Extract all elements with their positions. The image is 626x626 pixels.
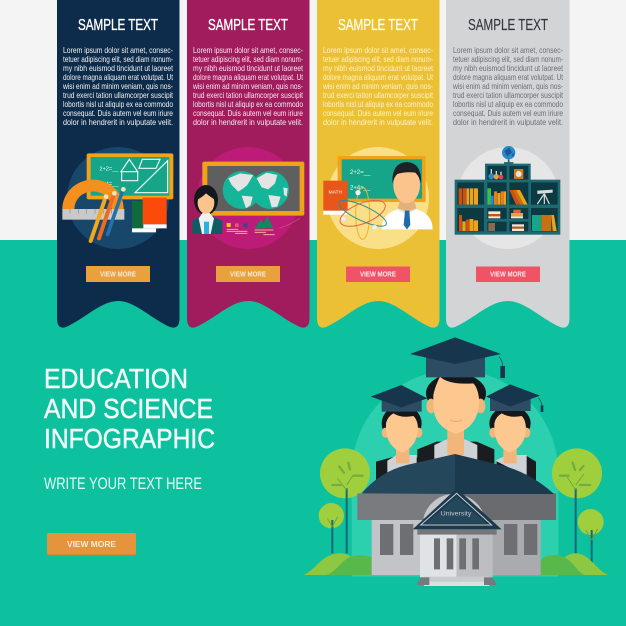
panel: banner 2 magenta: [187, 0, 310, 328]
body text 3: tetuer adipiscing elit, sed diam nonum-: [323, 55, 433, 64]
body text 3: lobortis nisl ut aliquip ex ea commodo: [323, 100, 433, 109]
body text 1: dolor in hendrerit in vulputate velit.: [63, 118, 173, 127]
button 1: VIEW MORE: [100, 272, 136, 278]
body text 3: Lorem ipsum dolor sit amet, consec-: [323, 46, 433, 55]
body text 3: my nibh euismod tincidunt ut laoreet: [323, 64, 434, 73]
title: [44, 363, 215, 454]
body text 1: lobortis nisl ut aliquip ex ea commodo: [63, 100, 173, 109]
body text 1: Lorem ipsum dolor sit amet, consec-: [63, 46, 173, 55]
body text 1: trud exerci tation ullamcorper suscipit: [63, 91, 174, 100]
body text 4: dolore magna aliquam erat volutpat. Ut: [453, 73, 564, 82]
body text 2: consequat. Duis autem vel eum iriure: [193, 109, 303, 118]
button 4: VIEW MORE: [490, 272, 526, 278]
right student: [486, 384, 543, 482]
panel: banner 3 yellow: [317, 0, 440, 328]
button 1: [86, 266, 150, 282]
body text 4: Lorem ipsum dolor sit amet, consec-: [453, 46, 563, 55]
body text 4: trud exerci tation ullamcorper suscipit: [453, 91, 564, 100]
body text 4: consequat. Duis autem vel eum iriure: [453, 109, 563, 118]
body text 4: dolor in hendrerit in vulputate velit.: [453, 118, 563, 127]
body text 2: dolor in hendrerit in vulputate velit.: [193, 118, 303, 127]
heading 4: SAMPLE TEXT: [468, 17, 548, 34]
body text 2: Lorem ipsum dolor sit amet, consec-: [193, 46, 303, 55]
body text 4: my nibh euismod tincidunt ut laoreet: [453, 64, 564, 73]
button 3: VIEW MORE: [360, 272, 396, 278]
left student: [371, 385, 427, 482]
button 2: [216, 266, 280, 282]
body text 3: consequat. Duis autem vel eum iriure: [323, 109, 433, 118]
illustration: science teacher, math book and atom: [323, 147, 433, 249]
body text 1: my nibh euismod tincidunt ut laoreet: [63, 64, 174, 73]
body text 4: lobortis nisl ut aliquip ex ea commodo: [453, 100, 563, 109]
body text 2: my nibh euismod tincidunt ut laoreet: [193, 64, 304, 73]
panel: banner 4 grey: [446, 0, 570, 328]
title: EDUCATION: [44, 363, 188, 394]
body text 1: consequat. Duis autem vel eum iriure: [63, 109, 173, 118]
center student: [410, 337, 505, 463]
main button: VIEW MORE: [67, 539, 116, 549]
body text 1: dolore magna aliquam erat volutpat. Ut: [63, 73, 174, 82]
body text 1: tetuer adipiscing elit, sed diam nonum-: [63, 55, 173, 64]
body text 1: [62, 46, 174, 127]
illustration: graduates and university: [303, 337, 608, 586]
body text 2: trud exerci tation ullamcorper suscipit: [193, 91, 304, 100]
university building: University: [441, 511, 472, 518]
heading 3: SAMPLE TEXT: [338, 17, 418, 34]
illustration: science teacher, math book and atom: 2+2=__: [350, 170, 371, 176]
body text 4: [452, 46, 564, 127]
body text 2: [192, 46, 304, 127]
button 3: [346, 266, 410, 282]
illustration: board, protractor, pencils and books: 2+4=__: [99, 182, 119, 188]
body text 3: dolore magna aliquam erat volutpat. Ut: [323, 73, 434, 82]
trees: [319, 448, 604, 570]
body text 4: tetuer adipiscing elit, sed diam nonum-: [453, 55, 563, 64]
banner shape 1: [57, 0, 180, 328]
body text 3: trud exerci tation ullamcorper suscipit: [323, 91, 434, 100]
body text 3: wisi enim ad minim veniam, quis nos-: [322, 82, 433, 91]
illustration: teacher and world map board: [192, 147, 304, 249]
illustration: bookshelf with globe: [455, 146, 560, 249]
banner shape 3: [317, 0, 440, 328]
illustration: science teacher, math book and atom: MATH: [328, 189, 343, 195]
body text 2: dolore magna aliquam erat volutpat. Ut: [193, 73, 304, 82]
illustration: board, protractor, pencils and books: 2+2=__: [99, 166, 119, 172]
main button: [47, 533, 136, 556]
button 4: [476, 266, 540, 282]
body text 4: wisi enim ad minim veniam, quis nos-: [452, 82, 563, 91]
illustration: board, protractor, pencils and books: [62, 147, 173, 249]
subtitle: WRITE YOUR TEXT HERE: [44, 474, 202, 493]
body text 1: wisi enim ad minim veniam, quis nos-: [62, 82, 173, 91]
body text 3: dolor in hendrerit in vulputate velit.: [323, 118, 433, 127]
heading 2: SAMPLE TEXT: [208, 17, 288, 34]
body text 2: wisi enim ad minim veniam, quis nos-: [192, 82, 303, 91]
banner shape 4: [446, 0, 570, 328]
body text 2: tetuer adipiscing elit, sed diam nonum-: [193, 55, 303, 64]
button 2: VIEW MORE: [230, 272, 266, 278]
backdrop circle: [352, 370, 558, 577]
hills: [303, 553, 608, 575]
illustration: science teacher, math book and atom: 2+4=__: [350, 185, 371, 191]
university building: [357, 454, 556, 586]
panel: banner 1 navy: [57, 0, 180, 328]
title: AND SCIENCE: [44, 393, 213, 424]
title: INFOGRAPHIC: [44, 423, 215, 454]
body text 3: [322, 46, 434, 127]
banner shape 2: [187, 0, 310, 328]
heading 1: SAMPLE TEXT: [78, 17, 158, 34]
body text 2: lobortis nisl ut aliquip ex ea commodo: [193, 100, 303, 109]
